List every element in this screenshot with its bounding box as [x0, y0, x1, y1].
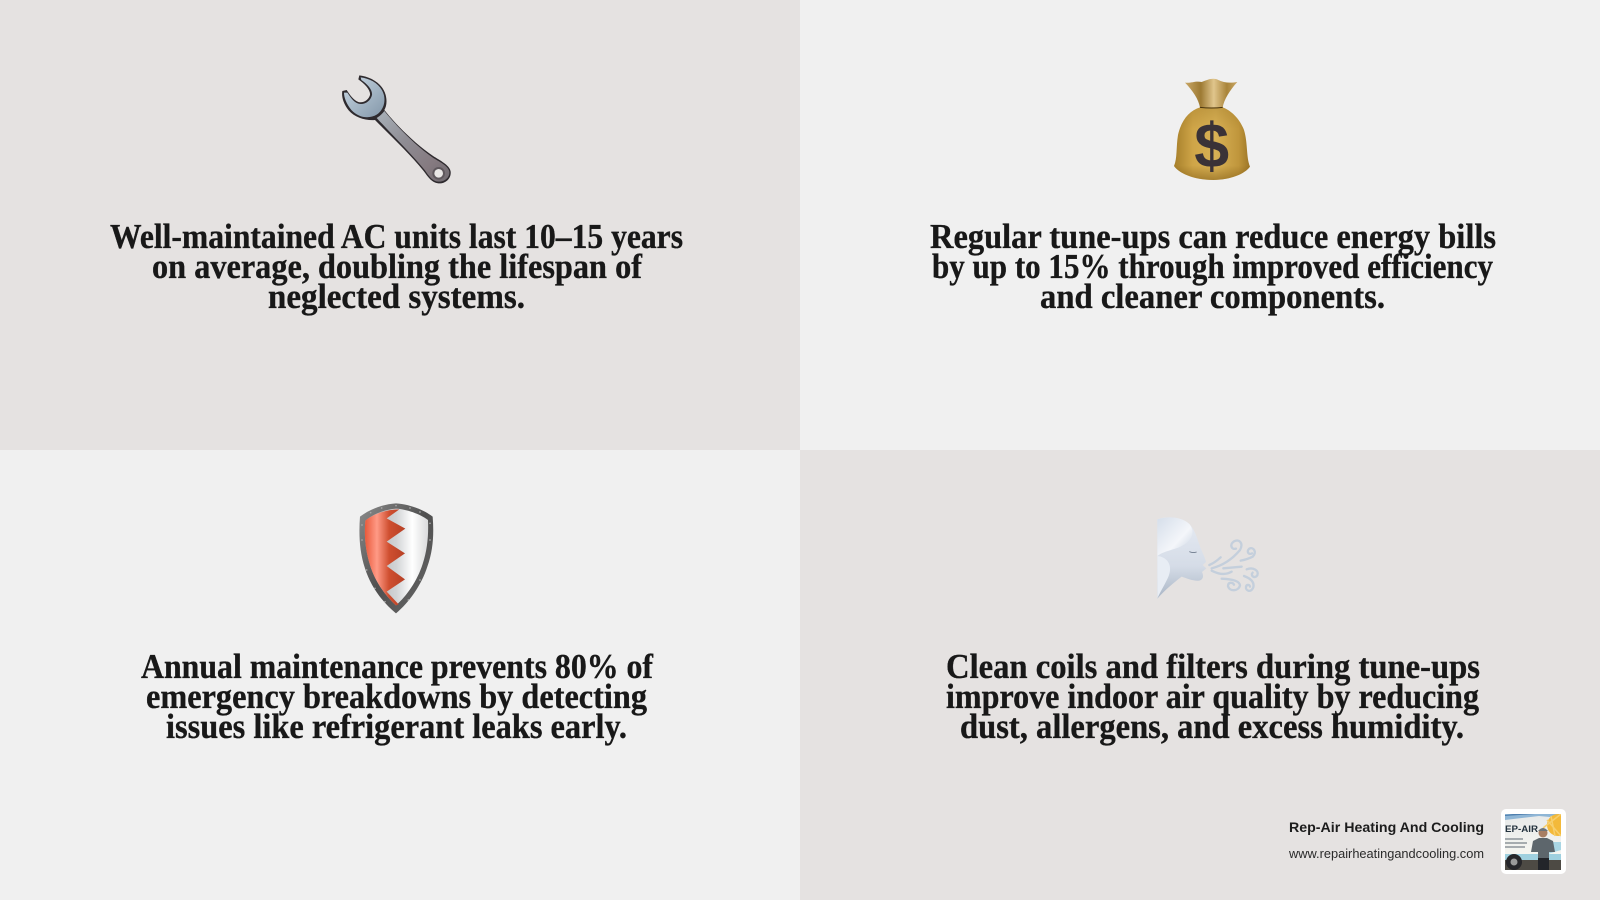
heading: energy text	[930, 217, 1496, 316]
panel: air quality	[800, 450, 1600, 900]
heading: lifespan text: neglected systems.	[268, 277, 525, 316]
icon: money bag	[1174, 79, 1250, 182]
footer: company brand	[1288, 809, 1569, 874]
company url: www.repairheatingandcooling.com	[1288, 846, 1484, 861]
heading: energy text: Regular tune-ups can reduce energy bills	[930, 217, 1496, 256]
heading: air quality text: improve indoor air quality by reducing	[946, 677, 1479, 716]
logo photo	[1501, 809, 1569, 874]
heading: air quality text	[946, 647, 1480, 746]
heading: breakdowns text: issues like refrigerant leaks early.	[166, 707, 627, 746]
panel: lifespan	[0, 0, 800, 450]
heading: air quality text: Clean coils and filters during tune-ups	[946, 647, 1480, 686]
icon: wrench	[342, 75, 451, 183]
icon: wind face	[1157, 517, 1258, 599]
heading: lifespan text: Well-maintained AC units last 10–15 years	[110, 217, 683, 256]
heading: energy text: by up to 15% through improved efficiency	[932, 247, 1493, 286]
heading: breakdowns text	[141, 647, 653, 746]
heading: lifespan text: on average, doubling the lifespan of	[152, 247, 642, 286]
heading: air quality text: dust, allergens, and excess humidity.	[960, 707, 1464, 746]
panel: breakdowns	[0, 450, 800, 900]
heading: lifespan text	[110, 217, 683, 316]
dollar sign: $	[1194, 112, 1229, 182]
heading: energy text: and cleaner components.	[1040, 277, 1385, 316]
icon: shield	[359, 503, 433, 613]
logo photo: EP-AIR	[1505, 824, 1539, 834]
heading: breakdowns text: Annual maintenance prevents 80% of	[141, 647, 653, 686]
panel: energy bills	[800, 0, 1600, 450]
company name: Rep-Air Heating And Cooling	[1289, 819, 1484, 835]
heading: breakdowns text: emergency breakdowns by detecting	[146, 677, 647, 716]
